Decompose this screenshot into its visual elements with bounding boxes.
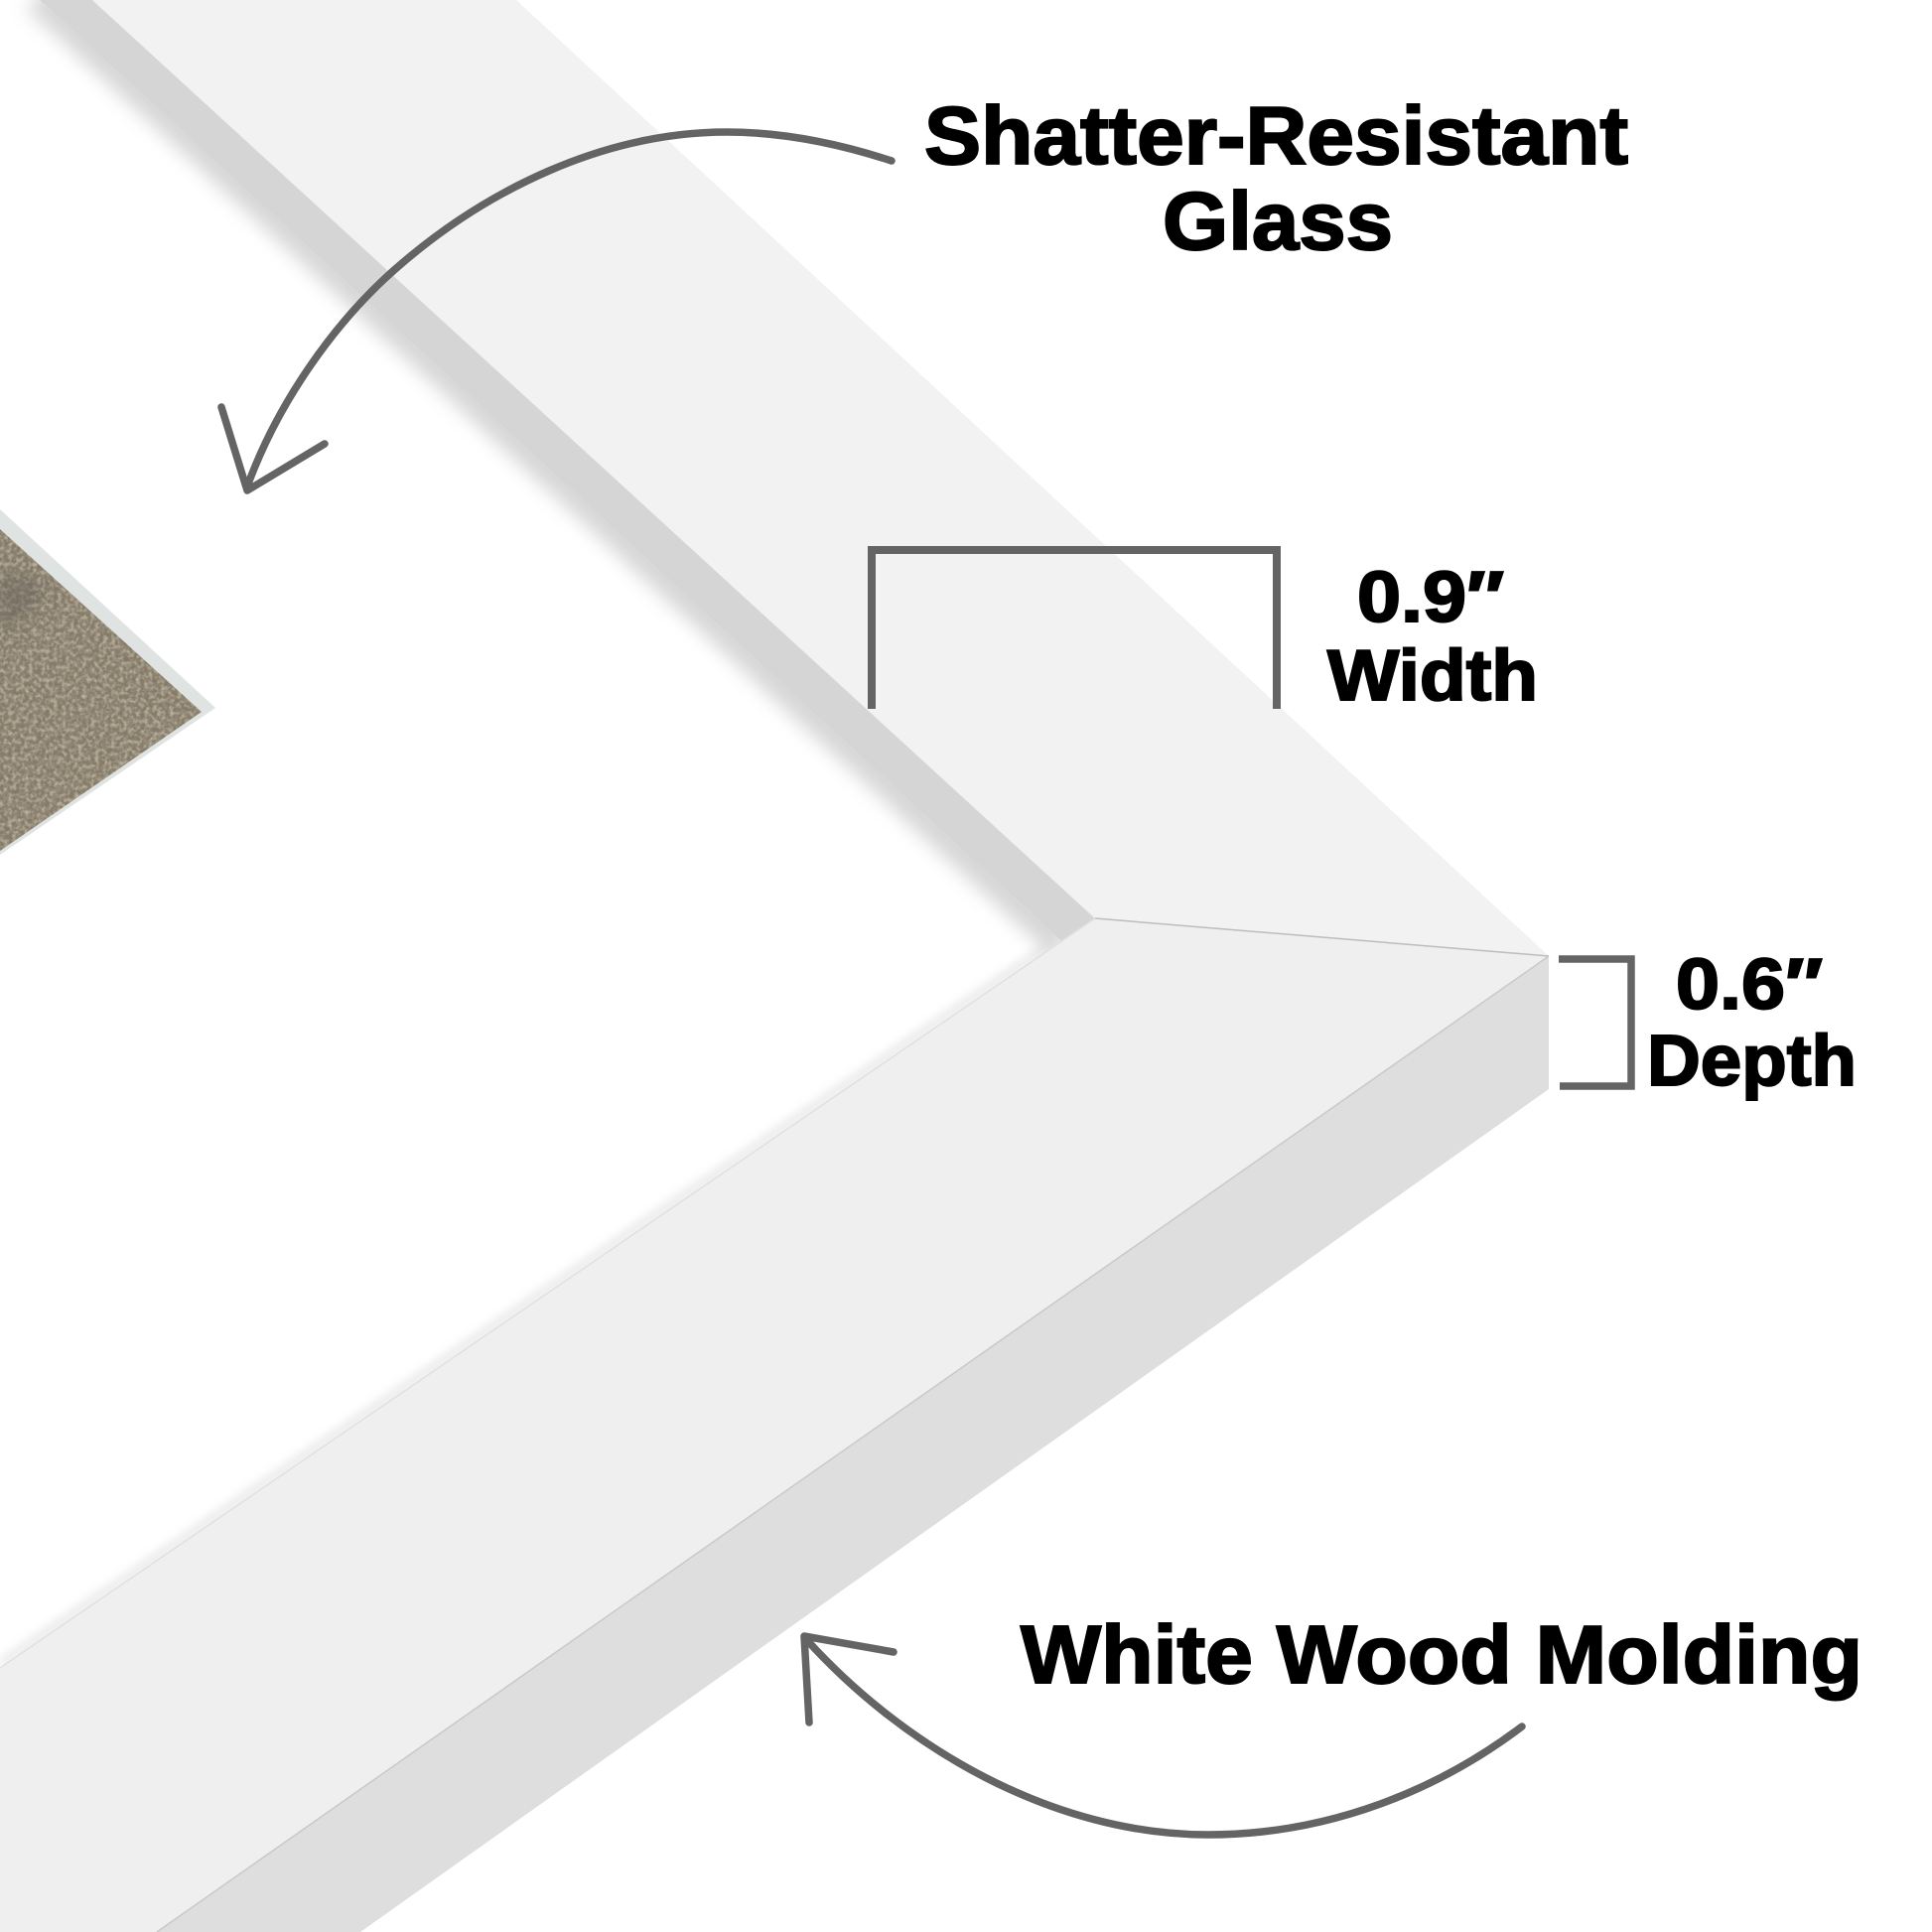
inner face edge line xyxy=(0,918,1095,1668)
arrow: white wood molding xyxy=(804,1636,1522,1835)
miter seam xyxy=(1095,918,1549,956)
heading: Shatter-Resistant Glass xyxy=(924,89,1628,267)
label: 0.9 inch width: Width xyxy=(1327,636,1538,716)
top molding face xyxy=(92,0,1549,956)
mat shadow under glass lip xyxy=(0,0,1081,1668)
heading: White Wood Molding: White Wood Molding xyxy=(1021,1608,1863,1701)
label: 0.9 inch width: 0.9″ xyxy=(1357,558,1504,637)
print border xyxy=(0,509,215,855)
label: 0.6 inch depth xyxy=(1647,945,1857,1101)
molding side depth xyxy=(157,956,1549,1932)
bracket: depth xyxy=(1559,959,1631,1086)
bottom molding face xyxy=(0,918,1549,1932)
print image xyxy=(0,516,208,859)
label: 0.6 inch depth: 0.6″ xyxy=(1676,945,1823,1025)
heading: Shatter-Resistant Glass: Shatter-Resistant xyxy=(924,89,1628,182)
label: 0.9 inch width xyxy=(1327,558,1538,716)
label: 0.6 inch depth: Depth xyxy=(1647,1022,1857,1101)
face edge line xyxy=(157,956,1549,1932)
arrow: shatter-resistant glass xyxy=(221,132,892,490)
photo print corner xyxy=(0,509,215,859)
heading: Shatter-Resistant Glass: Glass xyxy=(1163,175,1393,267)
bracket: width xyxy=(872,550,1277,709)
glass lip edge xyxy=(40,0,1095,941)
